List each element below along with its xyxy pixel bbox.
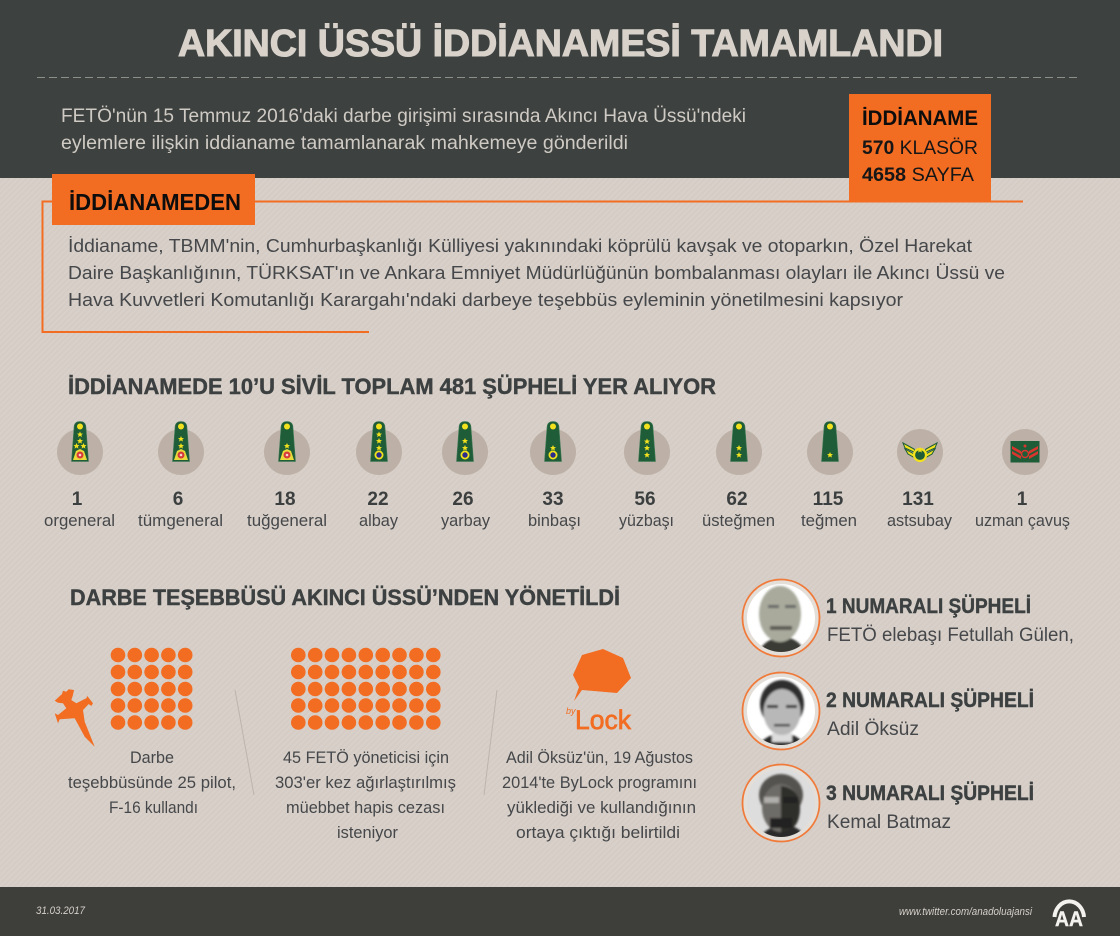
footer: 31.03.2017	[36, 905, 86, 917]
rank counts: 131	[902, 489, 934, 510]
heading: coup attempt: DARBE TEŞEBBÜSÜ AKINCI ÜSSÜ’NDEN YÖNETİLDİ	[70, 585, 620, 610]
dot grid: 45 leaders	[291, 648, 441, 730]
rank labels: teğmen	[801, 511, 857, 530]
text block: bylock	[502, 748, 697, 842]
icon: F-16 jet	[55, 689, 95, 747]
text block: leaders	[275, 748, 456, 842]
rank labels: binbaşı	[528, 511, 581, 530]
rank counts: 6	[173, 489, 183, 510]
icon: uzman çavuş	[1002, 429, 1048, 475]
icon: yarbay	[442, 422, 488, 475]
icon: albay	[356, 422, 402, 475]
rank counts: 1	[1017, 489, 1028, 510]
suspect 2 text: 2 NUMARALI ŞÜPHELİ	[826, 689, 1034, 712]
suspect 1 text	[826, 595, 1074, 646]
text block: leaders: 45 FETÖ yöneticisi için	[283, 748, 449, 767]
rank labels	[44, 511, 1070, 530]
text block: pilots: teşebbüsünde 25 pilot,	[68, 773, 236, 792]
rank labels: üsteğmen	[702, 511, 775, 530]
text block: leaders: müebbet hapis cezası	[286, 798, 445, 817]
icon: ByLock logo: Lock	[575, 705, 631, 735]
text block: iddianameden: Daire Başkanlığının, TÜRKSAT'ın ve Ankara Emniyet Müdürlüğünün bombalanması olayları ile Akıncı Üssü ve	[68, 263, 1005, 283]
icon: binbaşı	[530, 422, 576, 475]
text block: leaders: isteniyor	[337, 823, 398, 842]
rank counts: 18	[274, 489, 296, 510]
intro text: FETÖ'nün 15 Temmuz 2016'daki darbe girişimi sırasında Akıncı Hava Üssü'ndeki	[61, 106, 746, 127]
footer: www.twitter.com/anadoluajansi	[899, 906, 1032, 918]
rank counts: 22	[367, 489, 389, 510]
rank counts: 33	[542, 489, 564, 510]
icon: orgeneral	[57, 422, 103, 475]
suspect 3 text: Kemal Batmaz	[827, 812, 951, 833]
heading: iddianameden: İDDİANAMEDEN	[69, 189, 241, 215]
text block: iddianameden	[68, 236, 1005, 310]
suspect 3 text: 3 NUMARALI ŞÜPHELİ	[826, 782, 1034, 805]
rank counts: 26	[452, 489, 474, 510]
suspect 2 text: Adil Öksüz	[827, 719, 919, 740]
rank counts: 115	[813, 489, 844, 510]
text block: iddianameden: İddianame, TBMM'nin, Cumhurbaşkanlığı Külliyesi yakınındaki köprülü kavşak ve otoparkın, Özel Harekat	[68, 236, 972, 256]
text block: pilots: F-16 kullandı	[109, 798, 198, 817]
icon: ByLock logo	[566, 649, 631, 735]
suspect 3 text	[826, 782, 1034, 833]
photo: suspect 3	[742, 764, 820, 842]
text block: bylock: 2014'te ByLock programını	[502, 773, 697, 792]
panel: iddianame stats	[849, 94, 991, 201]
title: AKINCI ÜSSÜ İDDİANAMESİ TAMAMLANDI	[178, 22, 943, 65]
heading: iddianameden	[52, 174, 255, 225]
icon: tümgeneral	[158, 422, 204, 475]
panel: iddianame stats: İDDİANAME	[862, 107, 978, 130]
rank counts: 62	[726, 489, 748, 510]
icon: ByLock logo: by	[566, 706, 576, 716]
rank labels: astsubay	[887, 511, 952, 530]
icon: tuğgeneral	[264, 422, 310, 475]
text block: bylock: ortaya çıktığı belirtildi	[516, 823, 680, 842]
rank labels: yüzbaşı	[619, 511, 674, 530]
dot grid: 25 pilots	[111, 648, 192, 730]
text block: bylock: yüklediği ve kullandığının	[507, 798, 696, 817]
rank counts	[72, 489, 1028, 510]
panel: iddianameden frame	[42, 202, 1023, 332]
icon: yüzbaşı	[624, 422, 670, 475]
text block: bylock: Adil Öksüz'ün, 19 Ağustos	[506, 748, 693, 767]
rank labels: tümgeneral	[138, 511, 223, 530]
suspect 2 text	[826, 689, 1034, 740]
icon: teğmen	[807, 422, 853, 475]
rank labels: albay	[359, 511, 398, 530]
rank labels: tuğgeneral	[247, 511, 327, 530]
icon: AA logo: AA	[1055, 908, 1083, 931]
text block: pilots	[68, 748, 236, 817]
rank labels: uzman çavuş	[975, 511, 1070, 530]
intro text	[61, 106, 746, 154]
header band	[0, 0, 1120, 178]
rank labels: orgeneral	[44, 511, 115, 530]
heading: suspects by rank: İDDİANAMEDE 10’U SİVİL TOPLAM 481 ŞÜPHELİ YER ALIYOR	[68, 374, 716, 399]
rank counts: 56	[634, 489, 656, 510]
rank counts: 1	[72, 489, 83, 510]
footer	[0, 887, 1120, 936]
text block: pilots: Darbe	[130, 748, 174, 767]
icon: astsubay	[897, 429, 943, 475]
suspect 1 text: 1 NUMARALI ŞÜPHELİ	[826, 595, 1031, 618]
panel: iddianame stats: 570 KLASÖR	[862, 138, 978, 159]
text block: iddianameden: Hava Kuvvetleri Komutanlığı Karargahı'ndaki darbeye teşebbüs eyleminin yönetilmesini kapsıyor	[68, 290, 903, 310]
text block: leaders: 303'er kez ağırlaştırılmış	[275, 773, 456, 792]
rank labels: yarbay	[441, 511, 490, 530]
intro text: eylemlere ilişkin iddianame tamamlanarak mahkemeye gönderildi	[61, 133, 628, 154]
panel: iddianame stats: 4658 SAYFA	[862, 165, 974, 186]
icon: üsteğmen	[716, 422, 762, 475]
photo: suspect 1	[742, 580, 820, 656]
photo: suspect 2	[742, 672, 820, 750]
suspect 1 text: FETÖ elebaşı Fetullah Gülen,	[827, 625, 1074, 646]
